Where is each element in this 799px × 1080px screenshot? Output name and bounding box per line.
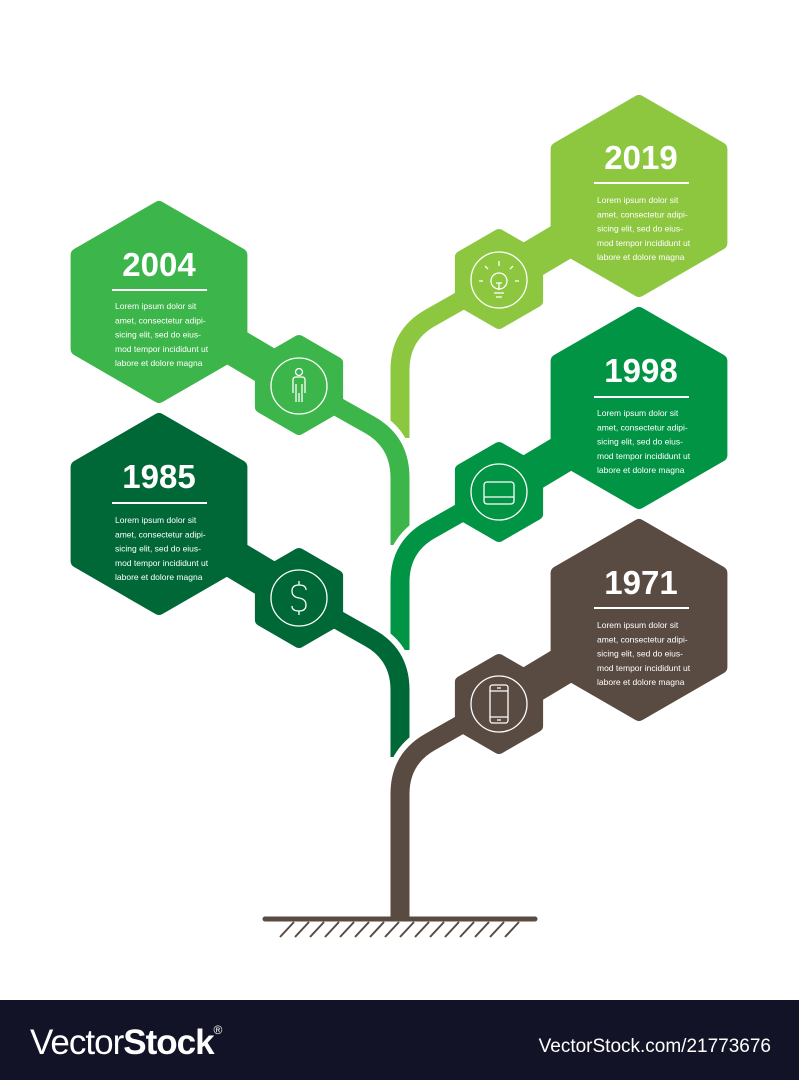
year 2004: 2004 — [122, 246, 196, 283]
branch: 2019 stem — [400, 280, 497, 438]
ground — [265, 919, 535, 937]
branch: 2004 stem — [299, 385, 400, 545]
year 1985: 1985 — [122, 458, 196, 495]
url: VectorStock.com/21773676 — [539, 1036, 771, 1057]
text 2004: sicing elit, sed do eius- — [115, 330, 201, 340]
text 2004: labore et dolore magna — [115, 358, 203, 368]
text 2004: Lorem ipsum dolor sit — [115, 301, 197, 311]
text 2004: amet, consectetur adipi- — [115, 315, 206, 325]
text 1971: mod tempor incididunt ut — [597, 663, 691, 673]
text 1985: amet, consectetur adipi- — [115, 529, 206, 539]
node: 1998 — [461, 314, 720, 536]
trunk: 1971 — [400, 704, 497, 918]
year 1998: 1998 — [604, 352, 678, 389]
text 2004: mod tempor incididunt ut — [115, 344, 209, 354]
year 1971: 1971 — [604, 564, 678, 601]
node: 2019 — [461, 102, 720, 323]
text 1971: amet, consectetur adipi- — [597, 634, 688, 644]
year 2019: 2019 — [604, 139, 678, 176]
logo: ® — [214, 1023, 223, 1037]
icon: lightbulb — [471, 252, 527, 308]
text 1998: sicing elit, sed do eius- — [597, 437, 683, 447]
text 1971: labore et dolore magna — [597, 677, 685, 687]
node: 1971 — [461, 526, 720, 748]
icon: dollar — [271, 570, 327, 626]
branch: 1985 stem — [299, 598, 400, 757]
text 1971: Lorem ipsum dolor sit — [597, 620, 679, 630]
node: 2004 — [78, 208, 337, 429]
branch: 1998 stem — [400, 492, 497, 650]
text 1998: mod tempor incididunt ut — [597, 451, 691, 461]
text 1985: mod tempor incididunt ut — [115, 558, 209, 568]
text 1998: Lorem ipsum dolor sit — [597, 408, 679, 418]
icon: person — [271, 358, 327, 414]
icon: phone — [471, 676, 527, 732]
text 2019: mod tempor incididunt ut — [597, 238, 691, 248]
node: 1985 — [78, 420, 337, 642]
footer bar — [0, 1000, 799, 1080]
text 1985: sicing elit, sed do eius- — [115, 544, 201, 554]
text 1985: labore et dolore magna — [115, 572, 203, 582]
text 1998: labore et dolore magna — [597, 465, 685, 475]
icon: card — [471, 464, 527, 520]
text 2019: amet, consectetur adipi- — [597, 209, 688, 219]
text 1971: sicing elit, sed do eius- — [597, 649, 683, 659]
text 2019: Lorem ipsum dolor sit — [597, 195, 679, 205]
text 2019: labore et dolore magna — [597, 252, 685, 262]
text 1998: amet, consectetur adipi- — [597, 422, 688, 432]
logo: VectorStock — [30, 1023, 214, 1062]
text 2019: sicing elit, sed do eius- — [597, 224, 683, 234]
text 1985: Lorem ipsum dolor sit — [115, 515, 197, 525]
